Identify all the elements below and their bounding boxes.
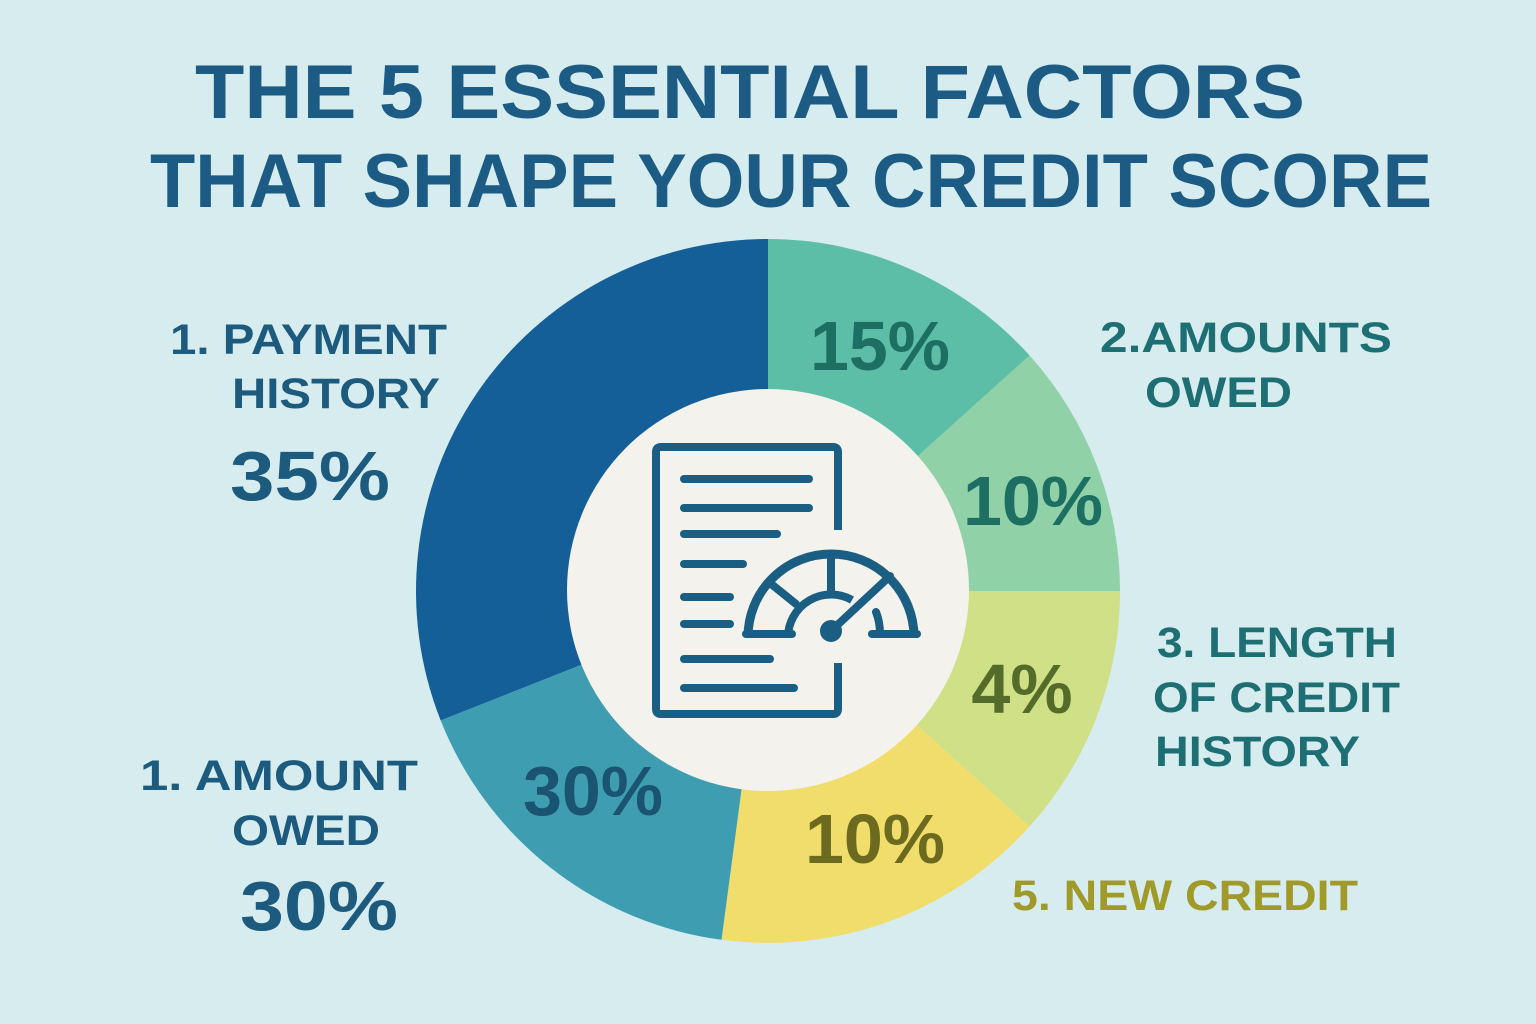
label: 10% amounts: 10% bbox=[963, 462, 1103, 540]
text: length of credit history: 3. LENGTH bbox=[1157, 619, 1397, 667]
text: length of credit history bbox=[1153, 619, 1400, 776]
text: length of credit history: HISTORY bbox=[1155, 728, 1360, 776]
text: payment history: HISTORY bbox=[232, 370, 440, 418]
text: new credit: 5. NEW CREDIT bbox=[1012, 872, 1358, 920]
text: payment history bbox=[170, 316, 447, 515]
title bbox=[150, 50, 1432, 224]
text: amounts owed: OWED bbox=[1145, 369, 1292, 417]
text: amounts owed bbox=[1100, 314, 1392, 417]
label: 10% new credit: 10% bbox=[805, 800, 945, 878]
label: 4%: 4% bbox=[971, 650, 1073, 728]
text: amount owed: OWED bbox=[232, 807, 380, 855]
donut chart bbox=[416, 239, 1120, 943]
text: amount owed: 1. AMOUNT bbox=[140, 752, 418, 800]
text: amount owed bbox=[140, 752, 418, 945]
text: payment history: 1. PAYMENT bbox=[170, 316, 447, 364]
title: THE 5 ESSENTIAL FACTORS bbox=[195, 50, 1305, 135]
text: amounts owed: 2.AMOUNTS bbox=[1100, 314, 1392, 362]
icon: credit report with gauge bbox=[656, 447, 917, 714]
text: amount owed: 30% bbox=[240, 867, 398, 945]
text: length of credit history: OF CREDIT bbox=[1153, 674, 1400, 722]
label: 15%: 15% bbox=[810, 307, 950, 385]
text: payment history: 35% bbox=[230, 437, 390, 515]
label: 30%: 30% bbox=[523, 752, 663, 830]
title: THAT SHAPE YOUR CREDIT SCORE bbox=[150, 139, 1432, 224]
